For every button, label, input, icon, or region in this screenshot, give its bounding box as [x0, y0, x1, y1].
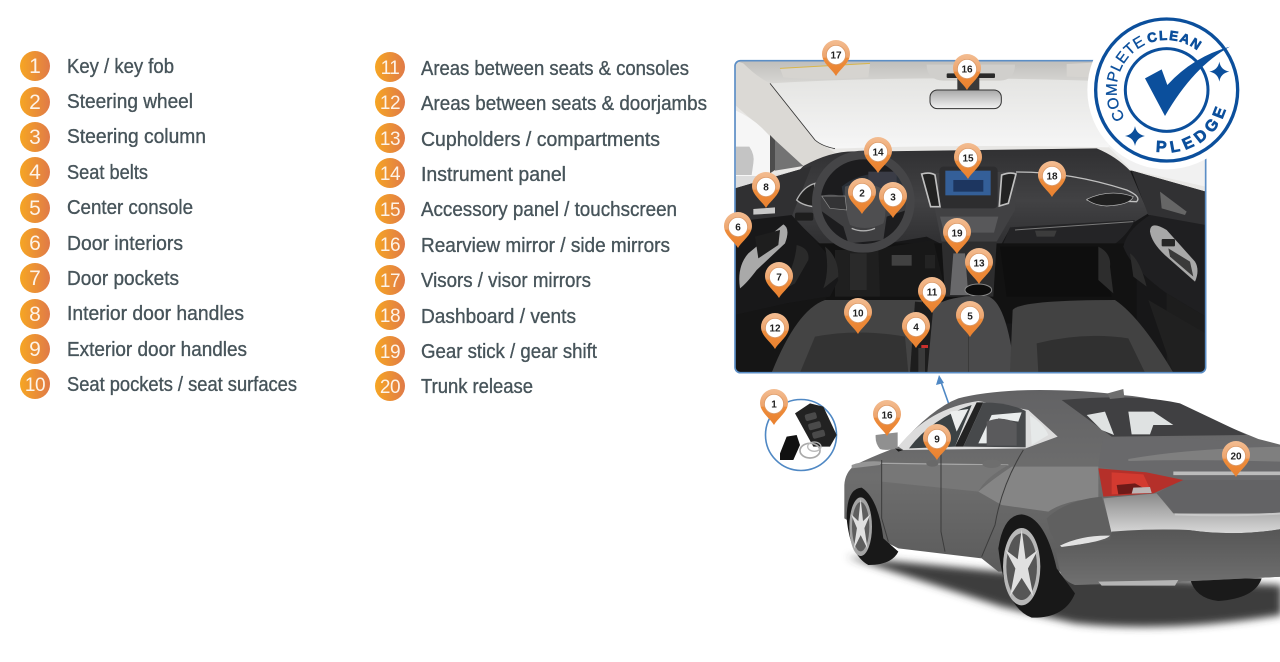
item 2: 2 [29, 91, 41, 114]
pin 9: 9 [934, 434, 940, 446]
shoulder and fender panels [978, 467, 1098, 512]
item 9: 9 [29, 338, 41, 361]
item 1: 1 [29, 55, 41, 78]
item 5: 5 [29, 197, 41, 220]
floor [820, 243, 1116, 253]
pin 10 [844, 298, 872, 334]
pin 18 [1038, 161, 1066, 197]
pin 5: 5 [967, 312, 973, 322]
pin 13 [965, 248, 993, 284]
item 13 [375, 123, 660, 153]
pin 12 [761, 313, 789, 349]
item 4 [20, 157, 148, 187]
pin 19 [943, 218, 971, 254]
steering wheel [815, 153, 912, 250]
pin 11: 11 [927, 288, 938, 298]
pin 16 interior [953, 54, 981, 90]
item 14: 14 [380, 164, 401, 185]
item 16: Rearview mirror / side mirrors [421, 235, 670, 257]
item 14 [375, 158, 566, 188]
pin 8: 8 [763, 182, 769, 194]
rear window [1062, 397, 1247, 437]
item 3: 3 [29, 126, 41, 149]
badge: Complete Clean Pledge [1088, 17, 1240, 170]
pin 15 [954, 143, 982, 179]
item 10: Seat pockets / seat surfaces [67, 374, 297, 396]
pin 4 [902, 312, 930, 348]
rear band [1103, 493, 1280, 533]
pin 10: 10 [852, 308, 864, 320]
left vent and cluster [797, 183, 815, 207]
pin 12: 12 [769, 324, 781, 334]
car body [844, 390, 1280, 585]
pin 17 [822, 40, 850, 76]
item 2 [20, 87, 193, 117]
item 17 [375, 265, 591, 295]
item 8 [20, 299, 244, 329]
pin 16 interior: 16 [961, 64, 973, 76]
item 1 [20, 51, 174, 81]
item 3: Steering column [67, 126, 206, 148]
pin 19: 19 [951, 228, 963, 240]
item 19: Gear stick / gear shift [421, 341, 597, 363]
item 18: Dashboard / vents [421, 306, 576, 328]
gear tunnel [942, 242, 997, 297]
item 8: 8 [29, 303, 41, 326]
item 10 [20, 369, 297, 399]
side windows [898, 401, 1058, 450]
pin 5 [956, 301, 984, 337]
icon: check mark [1145, 47, 1230, 116]
far wheel [1190, 578, 1262, 601]
badge: Complete Clean Pledge: CLEAN [1147, 30, 1202, 50]
item 6: 6 [29, 232, 41, 255]
taillight [1098, 468, 1183, 497]
item 10: 10 [25, 375, 45, 396]
item 18 [375, 300, 576, 330]
item 8: Interior door handles [67, 303, 244, 325]
pin 2: 2 [859, 188, 865, 200]
item 16: 16 [380, 235, 400, 256]
item 6: Door interiors [67, 233, 183, 255]
item 19: 19 [380, 342, 400, 363]
pin 14: 14 [872, 148, 884, 158]
item 19 [375, 336, 597, 366]
panel: cleaning checklist, right column [375, 52, 707, 401]
item 12: Areas between seats & doorjambs [421, 93, 707, 115]
pin 15: 15 [962, 154, 974, 164]
rear fender [1047, 497, 1112, 548]
pin 20 [1222, 441, 1250, 477]
arrow from car to interior [936, 375, 958, 430]
pin 6: 6 [735, 222, 741, 234]
dashboard [790, 148, 1148, 253]
pin 20: 20 [1230, 452, 1242, 462]
item 3 [20, 122, 206, 152]
badge: Complete Clean Pledge: COMPLETE [1106, 36, 1146, 121]
item 11: 11 [381, 58, 399, 79]
item 17: Visors / visor mirrors [421, 270, 591, 292]
item 4: Seat belts [67, 162, 148, 184]
item 14: Instrument panel [421, 164, 566, 186]
pin 8 [752, 172, 780, 208]
ground shadow [847, 557, 1280, 627]
pin 1: 1 [771, 400, 777, 410]
item 13: Cupholders / compartments [421, 129, 660, 151]
pin 11 [918, 277, 946, 313]
door handles [926, 460, 938, 467]
side mirror [876, 432, 898, 450]
item 15: 15 [380, 200, 400, 221]
panel: cleaning checklist, left column [20, 51, 297, 399]
panel: car interior illustration [735, 61, 1206, 373]
item 11: Areas between seats & consoles [421, 58, 689, 80]
pin 3 [879, 182, 907, 218]
item 15 [375, 194, 677, 224]
item 7 [20, 263, 179, 293]
pin 2 [848, 178, 876, 214]
pin 18: 18 [1046, 172, 1058, 182]
item 5 [20, 193, 193, 223]
trunk [1098, 437, 1280, 482]
dark lower cabin base [735, 166, 1206, 373]
item 6 [20, 228, 183, 258]
item 20 [375, 371, 533, 401]
left door [736, 169, 809, 220]
pin 3: 3 [890, 192, 896, 204]
item 16 [375, 229, 670, 259]
pin 9 [923, 424, 951, 460]
pin 7 [765, 262, 793, 298]
pin 1 [760, 389, 788, 425]
map pins [724, 40, 1250, 477]
pin 6 [724, 212, 752, 248]
badge: Complete Clean Pledge: PLEDGE [1156, 106, 1226, 153]
item 5: Center console [67, 197, 193, 219]
item 20: 20 [380, 377, 400, 398]
car illustration [844, 389, 1280, 627]
item 12: 12 [380, 93, 400, 114]
wheels [847, 488, 898, 565]
item 15: Accessory panel / touchscreen [421, 199, 677, 221]
pin 16 side mirror: 16 [881, 410, 893, 422]
right door [1132, 171, 1206, 227]
item 20: Trunk release [421, 376, 533, 398]
key fob inset [766, 400, 837, 470]
item 9 [20, 334, 247, 364]
item 9: Exterior door handles [67, 339, 247, 361]
center stack [936, 172, 1016, 242]
icon: sparkle right [1209, 62, 1229, 82]
item 7: 7 [29, 267, 41, 290]
item 4: 4 [29, 161, 41, 184]
item 17: 17 [380, 271, 400, 292]
item 12 [375, 87, 707, 117]
pin 13: 13 [973, 258, 985, 270]
item 18: 18 [380, 306, 400, 327]
icon: sparkle left [1125, 126, 1145, 146]
pin 4: 4 [913, 322, 919, 334]
pin 16 side mirror [873, 400, 901, 436]
item 7: Door pockets [67, 268, 179, 290]
icon: key fob [780, 403, 837, 460]
item 1: Key / key fob [67, 56, 174, 78]
pin 14 [864, 137, 892, 173]
pin 7: 7 [776, 272, 782, 284]
item 13: 13 [380, 129, 400, 150]
rearview mirror [930, 90, 1001, 109]
item 11 [375, 52, 689, 82]
item 2: Steering wheel [67, 91, 193, 113]
seats [772, 300, 933, 373]
pin 17: 17 [830, 50, 842, 62]
